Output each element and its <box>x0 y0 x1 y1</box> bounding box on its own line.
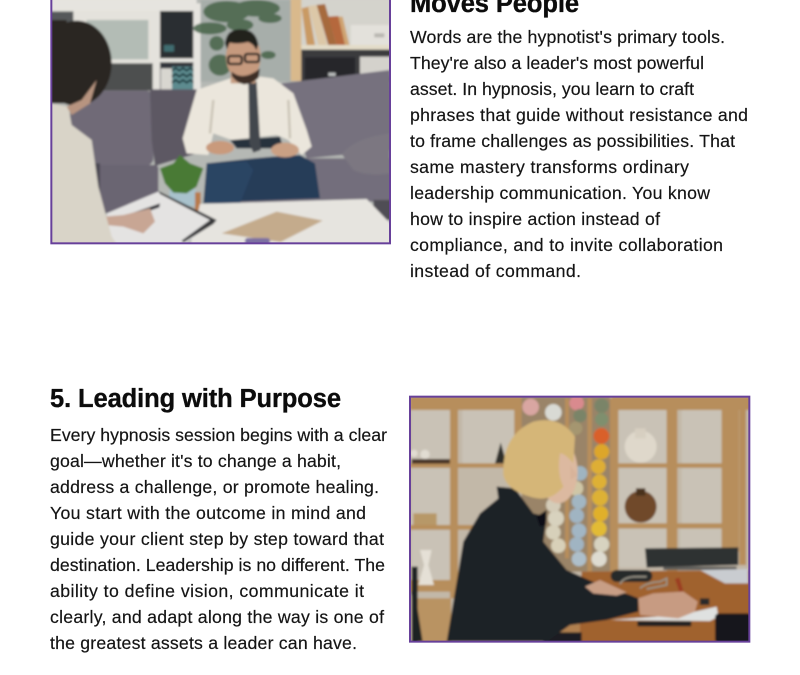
text block: words as tools: instead of command. <box>410 261 581 281</box>
text block: leading with purpose: guide your client step by step toward that <box>50 529 384 549</box>
sofa <box>70 91 153 166</box>
text block: words as tools: how to inspire action instead of <box>410 209 660 229</box>
woman <box>447 420 698 642</box>
shelf cells <box>412 410 722 580</box>
text block: words as tools: Words are the hypnotist's primary tools. <box>410 27 725 47</box>
text block: leading with purpose: destination. Leadership is no different. The <box>50 555 385 575</box>
plant foliage <box>193 0 282 76</box>
text block: leading with purpose: You start with the outcome in mind and <box>50 503 366 523</box>
text block: words as tools: compliance, and to invite collaboration <box>410 235 723 255</box>
text block: words as tools: phrases that guide without resistance and <box>410 105 748 125</box>
text block: words as tools: asset. In hypnosis, you learn to craft <box>410 79 694 99</box>
text block: leading with purpose <box>50 425 387 653</box>
heading: 5. Leading with Purpose: 5. Leading with Purpose <box>50 385 341 413</box>
vases and objects <box>625 431 657 463</box>
therapist seen from behind <box>42 20 217 247</box>
text block: words as tools: same mastery transforms ordinary <box>410 157 689 177</box>
man on sofa <box>183 29 320 203</box>
text block: leading with purpose: the greatest assets a leader can have. <box>50 633 357 653</box>
small potted plant <box>160 155 203 211</box>
text block: leading with purpose: goal—whether it's to change a habit, <box>50 451 341 471</box>
text block: words as tools: leadership communication. You know <box>410 183 710 203</box>
desk and chair <box>578 570 753 645</box>
text block: leading with purpose: address a challenge, or promote healing. <box>50 477 379 497</box>
photo: woman writing at desk <box>407 393 753 647</box>
text block: words as tools <box>410 27 748 281</box>
text block: leading with purpose: ability to define vision, communicate it <box>50 581 364 601</box>
text block: leading with purpose: Every hypnosis session begins with a clear <box>50 425 387 445</box>
text block: words as tools: to frame challenges as possibilities. That <box>410 131 735 151</box>
photo: therapist with client on sofa <box>42 0 397 250</box>
coffee table <box>190 199 393 247</box>
yarn balls column <box>522 396 610 572</box>
text block: leading with purpose: clearly, and adapt along the way is one of <box>50 607 384 627</box>
text block: words as tools: They're also a leader's most powerful <box>410 53 704 73</box>
shelf wood frame <box>410 397 750 598</box>
